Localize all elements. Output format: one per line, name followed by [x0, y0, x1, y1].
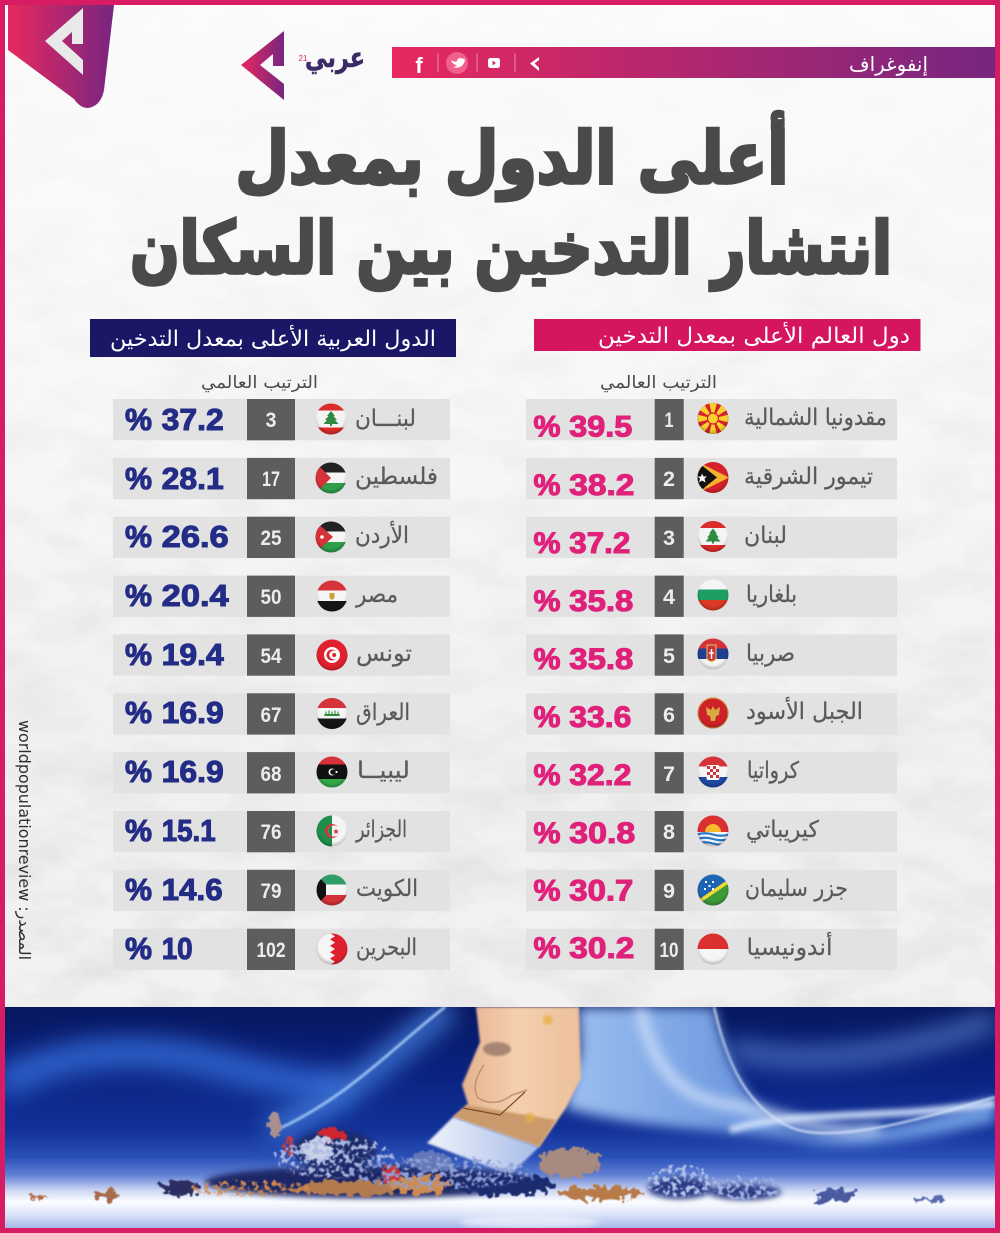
- brand logo: [241, 31, 365, 100]
- value: 28.1: [162, 461, 224, 496]
- smoke: right plume: [565, 1007, 995, 1145]
- value: %: [125, 637, 152, 672]
- value: %: [125, 931, 152, 966]
- value: %: [534, 759, 560, 792]
- heading: world countries: [534, 319, 920, 351]
- row 8: Kiribati: [526, 811, 897, 852]
- value: 16.9: [162, 754, 224, 789]
- name: مقدونيا الشمالية: [744, 405, 887, 431]
- brand number: 21: [299, 54, 308, 63]
- value: [534, 874, 633, 908]
- row 10: Indonesia: [526, 929, 897, 970]
- flag: Egypt: [316, 580, 348, 612]
- name: الكويت: [356, 876, 418, 902]
- name: تيمور الشرقية: [744, 464, 873, 490]
- panel: world ranking: [526, 399, 897, 970]
- row 1: North Macedonia: [526, 399, 897, 444]
- flag: Timor-Leste: [697, 462, 729, 494]
- value: %: [125, 695, 152, 730]
- rank 50: 50: [260, 586, 282, 609]
- value: 30.2: [569, 932, 634, 965]
- rank 3: 3: [663, 527, 675, 550]
- rank 1: 1: [664, 409, 674, 432]
- icon: corner chevron: [45, 8, 83, 75]
- value: %: [534, 817, 560, 850]
- row 5: Serbia: [526, 634, 897, 676]
- flag: Montenegro: [697, 697, 729, 729]
- name: بلغاريا: [746, 582, 797, 608]
- cigarette: [427, 1007, 581, 1175]
- value: [534, 643, 633, 676]
- flag: Algeria: [316, 815, 348, 847]
- row 6: Iraq: [113, 693, 450, 735]
- value: [125, 519, 229, 554]
- value: 26.6: [162, 519, 229, 554]
- cigarette filter: [427, 1117, 539, 1175]
- flag: Lebanon: [315, 403, 347, 435]
- flag: Iraq: [316, 698, 348, 730]
- row 9: Solomon Islands: [526, 870, 897, 911]
- value: 32.2: [569, 759, 631, 792]
- rank 9: 9: [663, 880, 675, 903]
- flag: North Macedonia: [697, 402, 729, 434]
- value: [125, 578, 230, 613]
- ash speckle: [190, 1140, 781, 1202]
- row 1: Lebanon: [113, 399, 450, 440]
- name: فلسطين: [355, 464, 438, 490]
- row 5: Tunisia: [113, 634, 450, 676]
- row 2: Timor-Leste: [526, 458, 897, 502]
- brand name: عربي: [305, 41, 365, 74]
- rank 102: 102: [256, 939, 286, 962]
- value: [534, 585, 633, 618]
- rank 7: 7: [663, 763, 675, 786]
- flag: Croatia: [697, 756, 729, 788]
- value: %: [125, 402, 152, 437]
- name: صربيا: [746, 641, 795, 667]
- value: [125, 872, 223, 907]
- panel: Arab ranking: [113, 399, 450, 970]
- rank 54: 54: [260, 645, 282, 668]
- row 7: Libya: [113, 752, 450, 793]
- value: [125, 461, 224, 496]
- heading: world countries: دول العالم الأعلى بمعدل التدخين: [598, 322, 910, 349]
- rank 67: 67: [260, 704, 282, 727]
- header strip: [392, 47, 995, 78]
- name: ليبيــا: [357, 758, 410, 784]
- rank 68: 68: [260, 763, 282, 786]
- value: %: [125, 813, 152, 848]
- value: [125, 754, 224, 789]
- value: [125, 402, 224, 437]
- rank 17: 17: [262, 468, 280, 491]
- name: الجبل الأسود: [746, 697, 863, 725]
- value: %: [534, 874, 560, 908]
- flag: Bahrain: [316, 933, 348, 965]
- name: البحرين: [356, 935, 417, 961]
- ash pile: [28, 1111, 947, 1202]
- smoke: left plume: [270, 1007, 450, 1132]
- rank 8: 8: [663, 821, 675, 844]
- value: 39.5: [569, 410, 632, 444]
- rank 79: 79: [260, 880, 282, 903]
- value: 38.2: [569, 469, 634, 502]
- value: %: [534, 410, 560, 444]
- subheading: Arab rank: الترتيب العالمي: [201, 373, 318, 393]
- heading: Arab countries: [90, 319, 456, 357]
- value: 19.4: [162, 637, 224, 672]
- value: [534, 759, 631, 792]
- rank 3: 3: [266, 409, 276, 432]
- title: [130, 111, 892, 291]
- row 4: Egypt: [113, 576, 450, 617]
- value: 14.6: [162, 872, 223, 907]
- value: 30.7: [569, 874, 633, 908]
- value: %: [125, 578, 152, 613]
- value: [534, 469, 634, 502]
- name: الجزائر: [355, 817, 407, 843]
- flag: Serbia: [697, 638, 729, 670]
- value: [534, 410, 632, 444]
- value: [534, 817, 635, 850]
- rank 10: 10: [660, 939, 678, 962]
- value: [534, 701, 631, 734]
- name: تونس: [356, 641, 412, 667]
- icon: facebook: f: [415, 53, 423, 78]
- value: 15.1: [162, 813, 216, 848]
- row 9: Kuwait: [113, 870, 450, 911]
- name: جزر سليمان: [745, 876, 848, 902]
- value: 10: [162, 931, 193, 966]
- value: %: [125, 754, 152, 789]
- row 3: Jordan: [113, 517, 450, 558]
- rank 6: 6: [663, 704, 675, 727]
- value: %: [534, 701, 560, 734]
- value: %: [534, 585, 560, 618]
- surface reflection: [460, 1215, 600, 1229]
- row 4: Bulgaria: [526, 576, 897, 618]
- value: 35.8: [569, 585, 633, 618]
- strip label: إنفوغراف: [849, 52, 928, 77]
- name: كيريباتي: [746, 817, 819, 843]
- value: [125, 695, 224, 730]
- flag: Tunisia: [316, 639, 348, 671]
- rank 4: 4: [663, 586, 675, 609]
- value: %: [534, 469, 560, 502]
- value: [125, 637, 224, 672]
- photo: cigarette and smoke: [0, 1007, 995, 1229]
- name: مصر: [355, 582, 398, 608]
- icon: twitter: [446, 52, 468, 74]
- subheading: world rank: الترتيب العالمي: [600, 373, 717, 393]
- flag: Solomon Islands: [697, 874, 729, 906]
- name: العراق: [356, 700, 410, 726]
- value: 30.8: [569, 817, 635, 850]
- value: 35.8: [569, 643, 633, 676]
- row 8: Algeria: [113, 811, 450, 852]
- value: %: [125, 519, 152, 554]
- rank 2: 2: [663, 468, 675, 491]
- flag: Libya: [316, 756, 348, 788]
- value: %: [534, 527, 560, 560]
- name: لبنان: [744, 523, 787, 549]
- value: [534, 527, 630, 560]
- name: كرواتيا: [747, 758, 799, 784]
- smoke: left wave: [0, 1053, 345, 1085]
- value: %: [125, 872, 152, 907]
- name: الأردن: [355, 521, 409, 549]
- flag: Kuwait: [316, 874, 348, 906]
- row 6: Montenegro: [526, 693, 897, 735]
- value: %: [125, 461, 152, 496]
- flag: Kiribati: [697, 815, 729, 847]
- rank 76: 76: [260, 821, 282, 844]
- row 10: Bahrain: [113, 929, 450, 970]
- value: 37.2: [162, 402, 224, 437]
- icon: brand chevron: [530, 57, 539, 71]
- value: [534, 932, 634, 965]
- corner logo: [8, 5, 114, 108]
- row 3: Lebanon: [526, 517, 897, 560]
- flag: Indonesia: [697, 933, 729, 965]
- flag: Lebanon: [697, 520, 729, 552]
- value: 16.9: [162, 695, 224, 730]
- rank 25: 25: [260, 527, 282, 550]
- name: لبنـــان: [355, 406, 416, 432]
- heading: Arab countries: الدول العربية الأعلى بمعدل التدخين: [110, 325, 436, 352]
- value: %: [534, 932, 560, 965]
- flag: Jordan: [315, 521, 347, 553]
- flag: Bulgaria: [697, 579, 729, 611]
- flag: Palestine: [315, 462, 347, 494]
- value: [125, 813, 216, 848]
- name: أندونيسيا: [746, 932, 832, 961]
- title: أعلى الدول بمعدل: [236, 111, 788, 201]
- source note: المصدر: worldpopulationreview: [14, 720, 34, 960]
- value: [125, 931, 193, 966]
- rank 5: 5: [663, 645, 675, 668]
- value: %: [534, 643, 560, 676]
- value: 20.4: [162, 578, 230, 613]
- icon: youtube: [488, 58, 500, 68]
- row 2: Palestine: [113, 458, 450, 499]
- row 7: Croatia: [526, 752, 897, 793]
- value: 33.6: [569, 701, 631, 734]
- value: 37.2: [569, 527, 630, 560]
